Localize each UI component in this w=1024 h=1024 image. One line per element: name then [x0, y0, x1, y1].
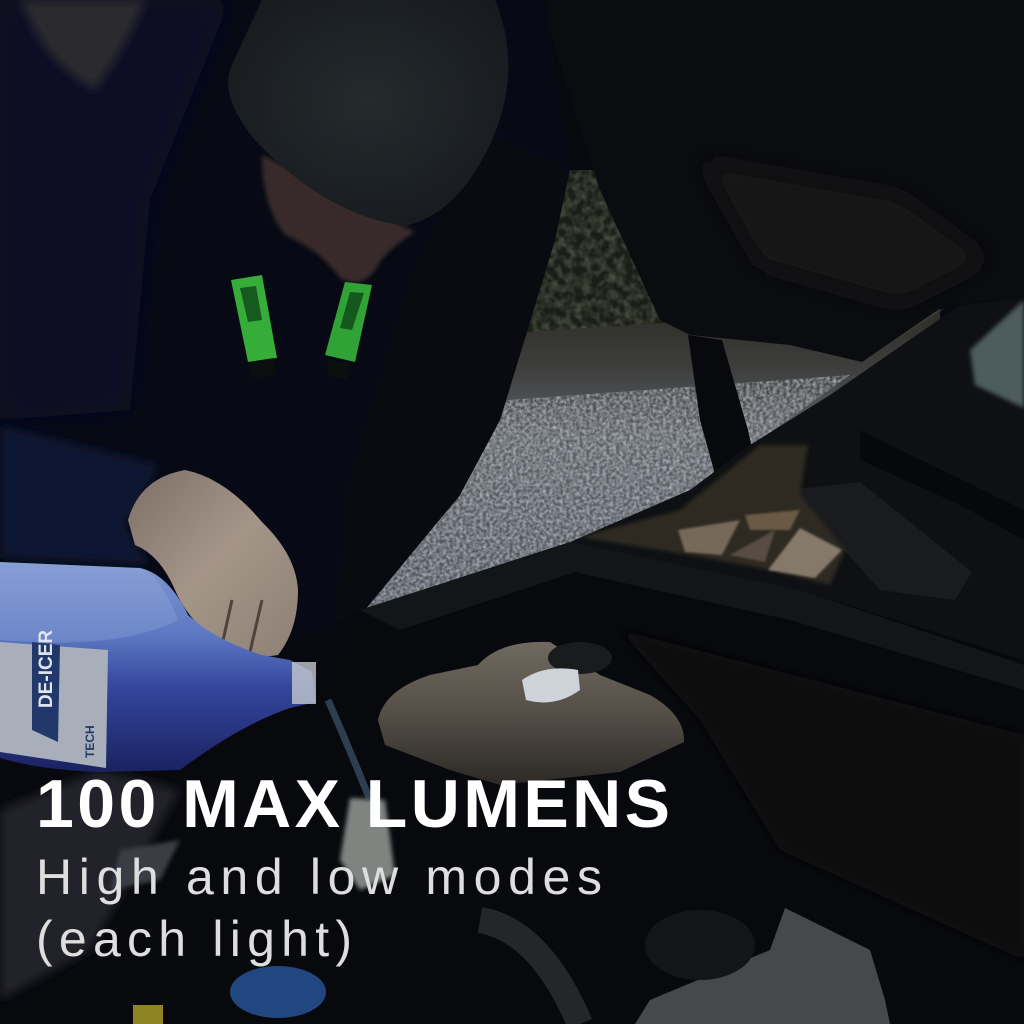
- subheading: High and low modes: [36, 849, 602, 905]
- subheading: (each light): [36, 911, 352, 967]
- bottle label: [0, 630, 108, 768]
- windshield and cowl: [570, 298, 1024, 660]
- pipes and funnel: [328, 700, 580, 1024]
- hand gripping bottle: [128, 470, 298, 656]
- neck light: right green arm: [325, 282, 372, 380]
- face: [262, 155, 415, 282]
- man in jacket: [0, 0, 570, 640]
- yellow fluid cap: [133, 1005, 163, 1024]
- open car hood: [540, 0, 1024, 478]
- headline: 100 MAX LUMENS: [36, 766, 670, 842]
- bottle label: DE-ICER: [36, 630, 57, 708]
- blue washer cap: [230, 966, 326, 1018]
- neck light: left green arm: [231, 275, 277, 378]
- bottle label: TECH: [83, 725, 97, 758]
- subheading: [36, 849, 602, 967]
- plastic cowl tray: [790, 482, 972, 600]
- engine block cover: [635, 908, 890, 1024]
- engine bay panel: [0, 542, 1024, 1024]
- background foliage strip: [510, 170, 690, 345]
- white reservoir cap: [522, 668, 580, 702]
- de-icer bottle: [0, 562, 316, 772]
- gravel driveway: [340, 305, 945, 620]
- coolant reservoir: [378, 642, 684, 785]
- dry leaves on cowl: [580, 445, 845, 585]
- knit hat: [228, 0, 508, 226]
- fur hood trim: [20, 0, 145, 90]
